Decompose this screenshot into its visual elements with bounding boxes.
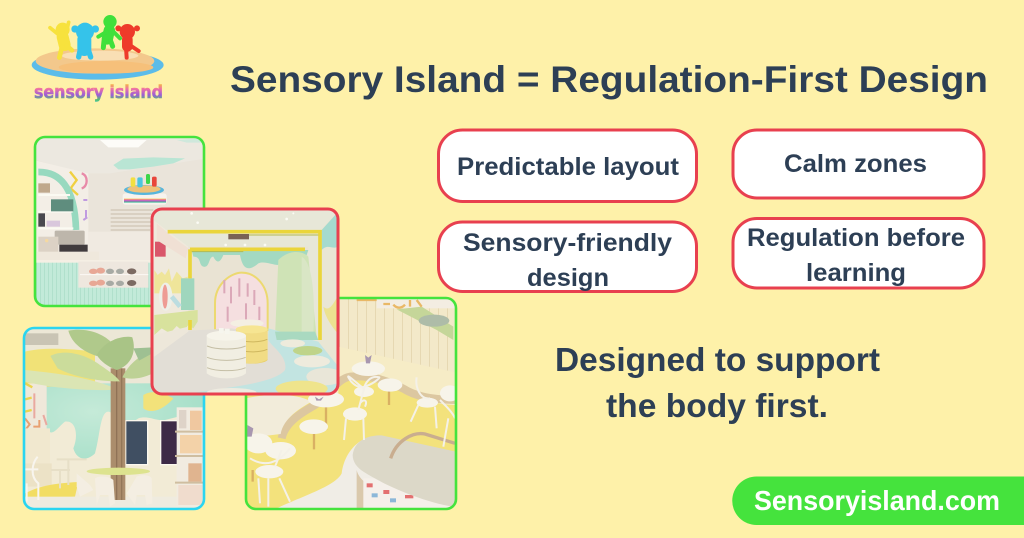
logo: Sensory Island	[32, 15, 164, 103]
website badge: Sensoryisland.com	[754, 485, 1000, 516]
tagline: Designed to support	[555, 341, 880, 378]
card: Predictable layout	[438, 130, 696, 202]
card: Sensory-friendly design	[438, 222, 696, 292]
logo island	[32, 48, 164, 80]
card: Calm zones: Calm zones	[784, 150, 927, 178]
photo: calm room with cushions	[152, 208, 344, 397]
logo red child	[115, 24, 140, 58]
logo wordmark: sensory island	[34, 83, 163, 103]
card: Calm zones	[733, 130, 984, 198]
card: Regulation before learning: learning	[806, 259, 906, 287]
tagline	[555, 341, 880, 424]
card: Regulation before learning: Regulation before	[747, 224, 965, 252]
logo yellow child	[50, 22, 72, 58]
card: Sensory-friendly design: Sensory-friendly	[463, 229, 672, 257]
card: Predictable layout: Predictable layout	[457, 153, 680, 181]
logo blue child	[71, 23, 99, 57]
card: Sensory-friendly design: design	[527, 264, 609, 292]
tagline: the body first.	[606, 387, 828, 424]
website badge	[732, 476, 1024, 525]
title: Sensory Island = Regulation-First Design	[230, 59, 988, 100]
logo green child	[98, 15, 120, 48]
photo: palm tree play room	[22, 326, 208, 513]
photo: cafe counter	[33, 136, 207, 309]
photo: cafe seating area	[244, 297, 460, 510]
card: Regulation before learning	[733, 218, 984, 288]
